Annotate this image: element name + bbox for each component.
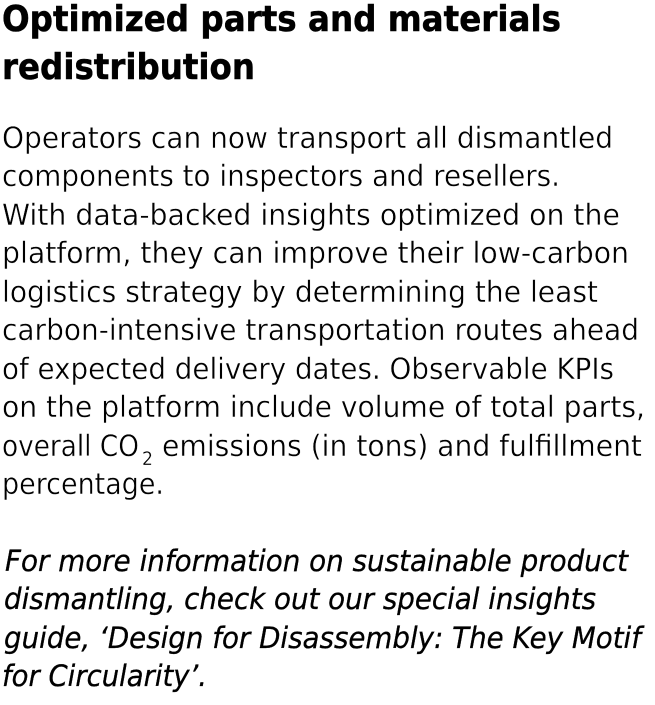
text block: body paragraph: Operators can now transport all dismantled (2, 121, 613, 155)
text block: body paragraph: of expected delivery dates. Observable KPIs (2, 352, 614, 386)
text block: italic closing note: dismantling, check out our special insights (4, 582, 596, 616)
title: redistribution (2, 47, 255, 88)
text block: body paragraph: overall CO (2, 429, 139, 463)
text block: body paragraph: emissions (in tons) and fulfillment (162, 429, 642, 463)
text block: body paragraph: logistics strategy by determining the least (2, 275, 598, 309)
text block: body paragraph: percentage. (2, 467, 164, 501)
text block: italic closing note: For more information on sustainable product (5, 544, 629, 578)
text block: body paragraph: With data-backed insights optimized on the (2, 198, 620, 232)
title: Optimized parts and materials (2, 0, 561, 40)
title (2, 0, 561, 88)
text block: body paragraph: 2 (142, 448, 153, 470)
text block: body paragraph: carbon-intensive transportation routes ahead (2, 313, 639, 347)
text block: italic closing note: for Circularity’. (2, 659, 207, 693)
text block: body paragraph: platform, they can improve their low-carbon (2, 236, 629, 270)
text block: italic closing note (2, 544, 645, 693)
text block: body paragraph (2, 121, 645, 501)
text block: body paragraph: components to inspectors and resellers. (2, 159, 560, 193)
